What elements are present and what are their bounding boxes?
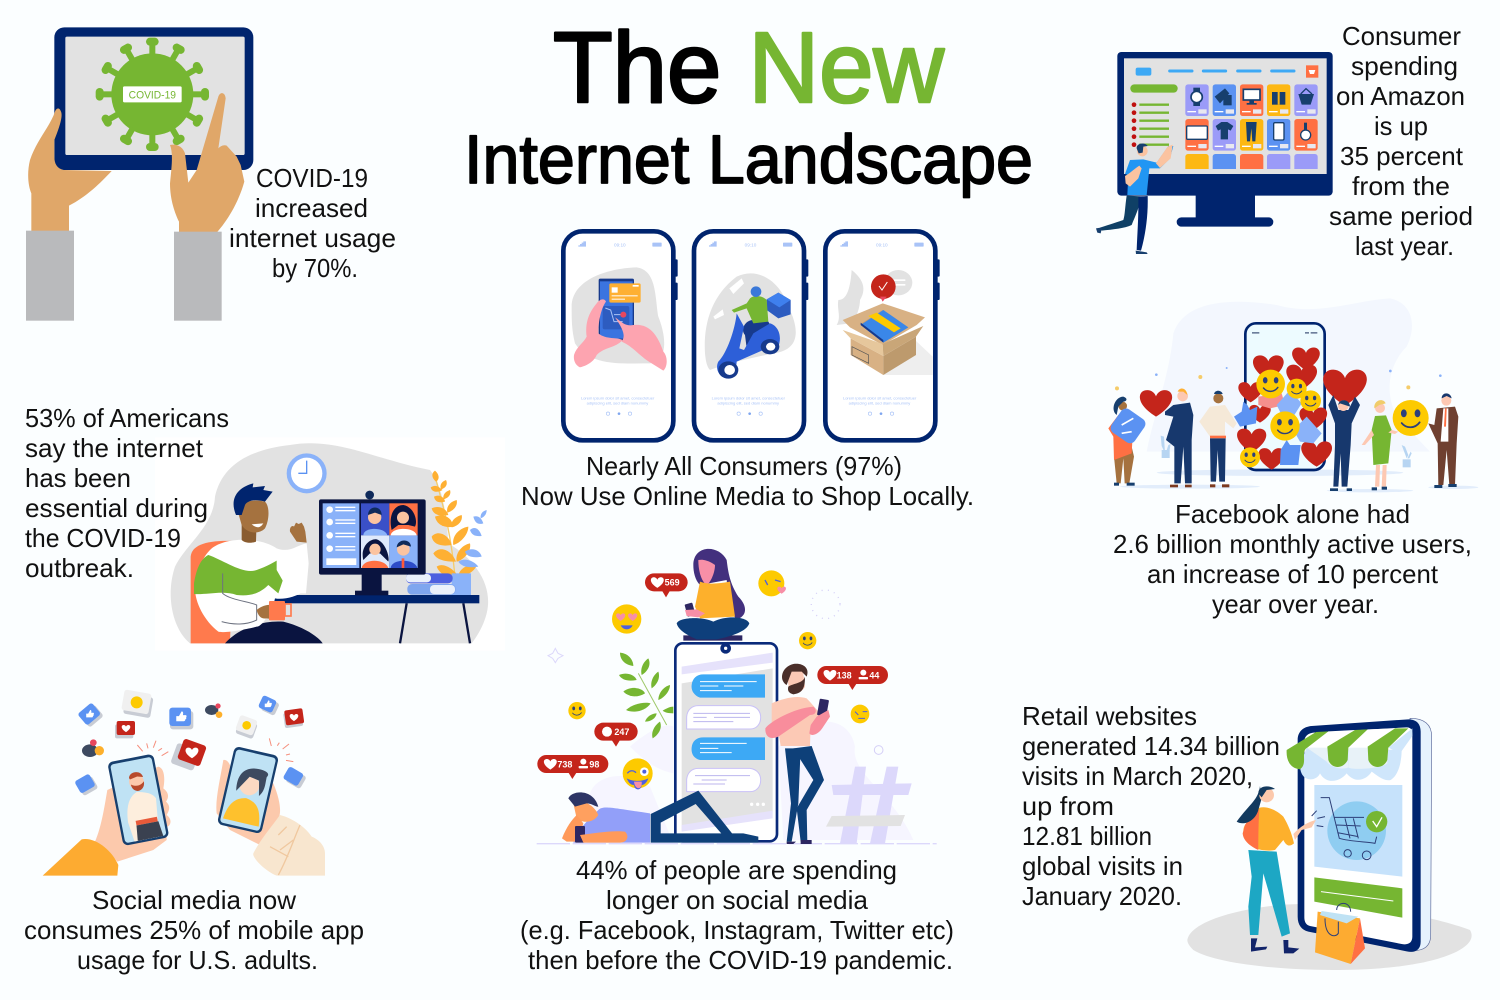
text: retail visits: up from — [1022, 791, 1114, 821]
awning — [1287, 728, 1412, 781]
left sleeve — [43, 839, 118, 876]
shopping bag — [1315, 903, 1365, 964]
text: social media longer: (e.g. Facebook, Instagram, Twitter etc) — [520, 915, 954, 945]
text: shop locally: Nearly All Consumers (97%) — [586, 451, 902, 481]
badge: 247 comments: 247 — [614, 727, 629, 737]
hashtag bars — [826, 783, 912, 827]
chair — [191, 541, 233, 643]
right sleeve — [253, 815, 325, 876]
monitor screen — [1124, 58, 1327, 174]
text: Americans essential: outbreak. — [25, 553, 134, 583]
text: Americans essential — [25, 403, 229, 583]
text: COVID usage: by 70%. — [272, 253, 358, 283]
text: COVID usage: internet usage — [229, 223, 396, 253]
badge: 569 likes — [645, 573, 688, 597]
text: Facebook users: Facebook alone had — [1175, 499, 1410, 529]
phone 2: 09:10 — [745, 243, 757, 248]
text: Americans essential: the COVID-19 — [25, 523, 181, 553]
text: Amazon spending: spending — [1351, 51, 1458, 81]
text: Facebook users: year over year. — [1212, 589, 1379, 619]
phone 1 — [563, 231, 678, 440]
text: social media longer — [520, 855, 954, 975]
stars and dots — [1115, 367, 1442, 390]
large heart held up — [1323, 370, 1367, 406]
text: COVID usage: increased — [255, 193, 368, 223]
phone 3: 09:10 — [876, 243, 888, 248]
right hand — [216, 760, 280, 847]
left hand — [95, 767, 171, 862]
badge: 738 likes 98 followers: 738 — [557, 759, 572, 769]
large phone — [675, 643, 777, 841]
ground line — [537, 842, 937, 846]
emojis — [568, 570, 869, 789]
large smiley — [1393, 400, 1429, 436]
title: The New — [553, 12, 945, 124]
navigation bar — [1136, 65, 1318, 78]
text: retail visits: global visits in — [1022, 851, 1183, 881]
text: Americans essential: has been — [25, 463, 131, 493]
text: mobile app usage: consumes 25% of mobile app — [24, 915, 364, 945]
badge: 738 likes 98 followers: 98 — [589, 759, 599, 769]
man in brown suit with smiley — [1428, 393, 1458, 488]
text: Americans essential: say the internet — [25, 433, 204, 463]
text: shop locally: Now Use Online Media to Shop Locally. — [521, 481, 974, 511]
panel: retail storefront phone — [1187, 718, 1472, 970]
plant — [431, 471, 487, 577]
hashtag — [840, 767, 898, 843]
text: Amazon spending: from the — [1352, 171, 1450, 201]
left phone — [107, 754, 169, 846]
white panel backing — [155, 437, 505, 651]
seated man — [194, 483, 323, 643]
floor shadow — [1187, 904, 1472, 970]
background blobs — [587, 722, 913, 843]
text: Facebook users — [1113, 499, 1472, 619]
shopper figure — [1096, 144, 1173, 254]
badge: 738 likes 98 followers — [537, 755, 608, 779]
text: COVID usage: COVID-19 — [256, 163, 368, 193]
left hand — [28, 109, 112, 232]
books and pot — [406, 573, 471, 595]
tablet — [54, 27, 253, 170]
text: mobile app usage: Social media now — [92, 885, 296, 915]
panel: hands holding phones — [43, 689, 325, 876]
reaction tiles — [74, 689, 307, 796]
sidebar list — [1130, 84, 1178, 147]
panel: three shopping phones — [563, 231, 940, 440]
icon: virus — [96, 38, 209, 151]
phone 2 — [694, 231, 808, 440]
text: Amazon spending: last year. — [1355, 231, 1454, 261]
man in beige with thumbs up — [1199, 391, 1237, 487]
phone 1: adipiscing elit, sed diam nonummy — [587, 401, 649, 405]
text: Amazon spending: 35 percent — [1340, 141, 1464, 171]
text: Amazon spending — [1329, 21, 1473, 261]
text: Amazon spending: is up — [1374, 111, 1428, 141]
text: Facebook users: 2.6 billion monthly active users, — [1113, 529, 1472, 559]
tablet screen — [65, 37, 245, 155]
woman shopper — [1237, 786, 1316, 953]
badge: 138 likes 44 followers — [817, 666, 888, 690]
right hand — [170, 93, 244, 233]
woman with retweet badge — [1108, 397, 1148, 486]
gray blob — [171, 443, 488, 643]
right sleeve — [174, 232, 222, 321]
cart card — [1314, 785, 1402, 877]
ground shadows — [1120, 469, 1478, 492]
phone back edge — [1410, 718, 1432, 951]
phone 2: adipiscing elit, sed diam nonummy — [717, 401, 779, 405]
phone 1: 09:10 — [614, 243, 626, 248]
right phone — [217, 746, 279, 834]
monitor frame — [1117, 52, 1333, 196]
green button — [1314, 877, 1402, 918]
sleeve cuff lines — [270, 825, 300, 875]
text: retail visits: January 2020. — [1022, 881, 1182, 911]
title: Internet Landscape — [464, 121, 1033, 198]
product tiles — [1185, 84, 1318, 169]
badge: 569 likes: 569 — [665, 578, 680, 588]
pointing dashes — [1312, 811, 1325, 827]
woman raising heart — [1328, 395, 1360, 491]
branch — [619, 653, 673, 738]
product icons — [1187, 88, 1314, 141]
woman in green dress — [1362, 400, 1398, 490]
panel: video call illustration — [155, 437, 505, 651]
text: COVID usage — [229, 163, 396, 283]
text: shop locally — [521, 451, 974, 511]
badge: 138 likes 44 followers: 138 — [837, 670, 852, 680]
text: Americans essential: essential during — [25, 493, 208, 523]
text: Amazon spending: on Amazon — [1336, 81, 1465, 111]
phone 2: Lorem ipsum dolor sit amet, consectetuer — [712, 396, 786, 400]
text: retail visits: 12.81 billion — [1022, 821, 1152, 851]
panel: Amazon storefront monitor — [1096, 52, 1333, 254]
seated woman on phone — [677, 549, 749, 641]
text: social media longer: then before the COVID-19 pandemic. — [528, 945, 953, 975]
text: social media longer: 44% of people are spending — [576, 855, 897, 885]
badge: 138 likes 44 followers: 44 — [869, 670, 879, 680]
wall clock — [287, 453, 327, 493]
chat bubbles — [82, 703, 222, 757]
phone screen — [1304, 727, 1412, 944]
monitor with video call — [319, 491, 426, 595]
phone 1: Lorem ipsum dolor sit amet, consectetuer — [581, 396, 655, 400]
text: social media longer: longer on social media — [606, 885, 869, 915]
text: mobile app usage — [24, 885, 364, 975]
standing man with beard — [765, 664, 830, 844]
potted plants — [1161, 436, 1412, 467]
phone body — [1298, 719, 1421, 952]
text: Amazon spending: same period — [1329, 201, 1473, 231]
panel: COVID-19 tablet illustration — [26, 27, 253, 321]
panel: Facebook social illustration — [1108, 298, 1478, 492]
background blob — [1147, 298, 1430, 452]
reclining man — [562, 791, 758, 843]
title — [464, 12, 1033, 198]
left sleeve — [26, 231, 74, 321]
phone 3: adipiscing elit, sed diam nonummy — [849, 401, 911, 405]
phone 3: Lorem ipsum dolor sit amet, consectetuer — [843, 396, 917, 400]
text: retail visits: Retail websites — [1022, 701, 1197, 731]
text: retail visits: generated 14.34 billion — [1022, 731, 1280, 761]
text: retail visits: visits in March 2020, — [1022, 761, 1253, 791]
phone 3 — [825, 231, 940, 440]
text: Amazon spending: Consumer — [1342, 21, 1461, 51]
monitor stand — [1177, 193, 1273, 227]
desk — [274, 595, 479, 643]
badge: 247 comments — [594, 723, 638, 747]
excitement dashes — [137, 738, 293, 762]
text: retail visits — [1022, 701, 1280, 911]
text: Americans essential: 53% of Americans — [25, 403, 229, 433]
man in navy suit with heart — [1140, 388, 1193, 487]
text: Facebook users: an increase of 10 percent — [1147, 559, 1439, 589]
phone with reactions — [1234, 323, 1332, 470]
icon: virus: COVID-19 — [129, 89, 176, 101]
panel: social media phone illustration — [537, 549, 937, 844]
decorative sparkle and ring — [548, 590, 883, 754]
text: mobile app usage: usage for U.S. adults. — [77, 945, 318, 975]
